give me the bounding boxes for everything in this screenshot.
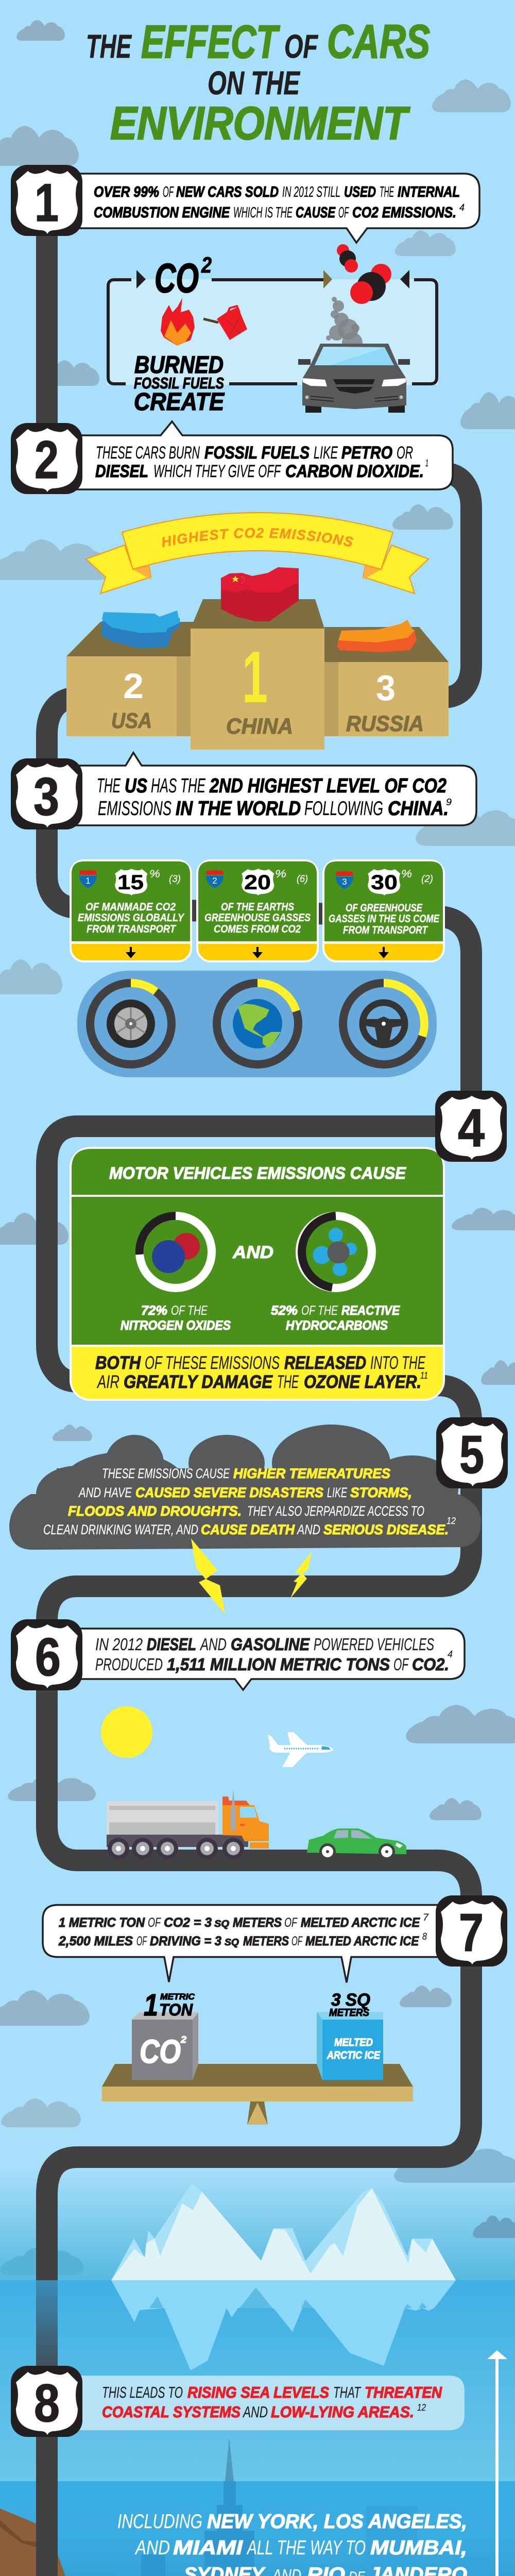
storm cloud text [43, 1466, 456, 1537]
panel: motor vehicles emissions [71, 1148, 444, 1400]
storm cloud [9, 1425, 481, 1550]
highway sign: 15 percent: 1 [85, 876, 91, 886]
bubble 7: OF [284, 1916, 298, 1930]
bubble 8: THIS LEADS TO [102, 2383, 183, 2401]
highway sign: 15 percent: % [149, 868, 160, 880]
bubble 6: DIESEL [147, 1635, 196, 1654]
bubble 1: USED [344, 184, 376, 200]
bubble 6: PRODUCED [95, 1655, 163, 1674]
submerged road section [36, 2280, 58, 2391]
cities text: ALL THE WAY TO [247, 2537, 366, 2559]
podium ranks: 3 [376, 668, 396, 708]
title: ON THE [208, 64, 301, 101]
bubble 2: THESE CARS BURN [96, 443, 200, 463]
scale labels: 3 SQ [331, 1990, 370, 2010]
podium ranks: CHINA [226, 714, 293, 739]
CO2 label: CO [154, 255, 199, 301]
route shield 1: 1 [35, 173, 59, 233]
storm cloud text: AND [296, 1522, 320, 1537]
route shield 6: 6 [35, 1628, 61, 1687]
storm cloud text: 12 [447, 1516, 456, 1526]
highway sign: 15 percent: FROM TRANSPORT [87, 923, 177, 935]
bubble 2: LIKE [314, 443, 338, 463]
bubble 1: COMBUSTION ENGINE [94, 205, 230, 221]
bubble 7 [43, 1905, 443, 1982]
highway sign: 30 percent: (2) [421, 874, 433, 885]
ozone statement: AIR [97, 1372, 119, 1392]
skyline silhouette [113, 2437, 515, 2576]
bubble 6: OF [393, 1655, 409, 1674]
and label: AND [232, 1243, 273, 1262]
icon: sun [101, 1706, 152, 1758]
bubble 1: OF [338, 205, 349, 221]
ozone statement: INTO THE [370, 1353, 425, 1373]
icon: flame [161, 298, 195, 346]
ozone statement: 11 [420, 1370, 428, 1381]
bubble 7: OF [148, 1916, 161, 1930]
ring: steering wheel 30 percent [343, 983, 424, 1064]
bubble 3: EMISSIONS [98, 798, 171, 820]
cities text: MIAMI [173, 2537, 243, 2559]
scale labels: 2 [180, 2035, 186, 2045]
ribbon: highest CO2 emissions: HIGHEST CO2 EMISSIONS [162, 528, 353, 547]
cities text: AND [134, 2537, 170, 2559]
storm cloud text: CAUSED SEVERE DISASTERS [135, 1485, 323, 1500]
water layers [0, 2280, 515, 2576]
bubble 1: OVER 99% [94, 184, 159, 200]
title: CARS [327, 15, 430, 68]
route shield 5: 5 [459, 1425, 484, 1485]
CO2 label: 2 [201, 253, 212, 278]
sky gradient near water [0, 2166, 515, 2280]
bubble 6: 4 [448, 1649, 453, 1659]
bubble 3 [72, 753, 476, 825]
ring: globe 20 percent [217, 983, 298, 1064]
ozone statement: THE [277, 1372, 299, 1392]
caption: hydrocarbons: OF THE [301, 1303, 338, 1318]
caption: hydrocarbons: REACTIVE [341, 1303, 400, 1318]
route shield 6 [11, 1619, 82, 1690]
bubble 1: OF [163, 184, 174, 200]
arrow markers [136, 270, 409, 289]
route shield 2 [11, 423, 82, 494]
route shield 4: 4 [458, 1098, 485, 1158]
bubble 8: RISING SEA LEVELS [187, 2383, 329, 2401]
title: THE [86, 28, 132, 65]
cities text: INCLUDING [117, 2511, 202, 2533]
bubble 7: CO2 = 3 [164, 1916, 212, 1930]
highway sign: 30 percent: GASSES IN THE US COME [329, 913, 440, 925]
title: OF [284, 28, 318, 65]
caption: hydrocarbons [271, 1303, 400, 1333]
bubble 2: FOSSIL FUELS [204, 443, 310, 463]
title: EFFECT [141, 16, 280, 68]
burned fossil fuels create text [134, 351, 225, 416]
ozone statement: BOTH [95, 1353, 141, 1373]
highway sign: 20 percent: 2 [212, 876, 217, 886]
scale labels: METERS [329, 2007, 370, 2019]
bubble 2 [72, 421, 453, 489]
map: China [221, 567, 299, 621]
cities text: MUMBAI, [370, 2537, 467, 2559]
balance scale [102, 1988, 413, 2125]
bubble 1: WHICH IS THE [233, 205, 293, 221]
storm cloud text: THESE EMISSIONS CAUSE [102, 1466, 230, 1481]
podium ranks: 2 [123, 666, 144, 706]
ozone statement: RELEASED [284, 1353, 366, 1373]
bubble 1: THE [380, 184, 394, 200]
scale labels: METRIC [160, 1992, 195, 2002]
podium [66, 567, 449, 750]
icon: CO2 molecules [337, 244, 391, 304]
panel heading: MOTOR VEHICLES EMISSIONS CAUSE [109, 1164, 407, 1182]
highway sign: 15 percent: (3) [169, 874, 181, 885]
bubble 7: MELTED ARCTIC ICE [301, 1916, 420, 1930]
bubble 7: OF [291, 1934, 303, 1948]
bubble 1 [72, 174, 479, 243]
bubble 6: POWERED VEHICLES [314, 1635, 434, 1654]
bubble 1: CAUSE [296, 205, 336, 221]
ozone statement: GREATLY DAMAGE [124, 1372, 273, 1392]
podium ranks: USA [111, 708, 152, 733]
podium ranks [111, 636, 424, 739]
storm cloud text: CAUSE DEATH [201, 1522, 295, 1537]
bubble 1: IN 2012 STILL [282, 184, 340, 200]
bubble 6 [72, 1629, 465, 1690]
highway sign: 15 percent: EMISSIONS GLOBALLY [78, 912, 185, 924]
podium ranks: 1 [242, 636, 268, 718]
route shield 4 [435, 1091, 507, 1162]
bubble 1: INTERNAL [398, 184, 460, 200]
bubble 7: 7 [423, 1912, 429, 1923]
ozone statement: OZONE LAYER. [304, 1372, 421, 1392]
route shield 8 [11, 2366, 82, 2437]
highway sign: 15 percent: 15 [117, 871, 144, 894]
highway sign: 30 percent [323, 860, 444, 961]
scale labels: MELTED [334, 2037, 373, 2048]
arrow: rising sea level [487, 2350, 507, 2576]
burned fossil fuels create text: BURNED [134, 351, 224, 378]
bubble 8: LOW-LYING AREAS. [271, 2403, 414, 2421]
scale labels: CO [140, 2033, 181, 2070]
bubble 3: 9 [446, 797, 452, 807]
ozone statement: OF THESE EMISSIONS [145, 1353, 280, 1373]
title [86, 15, 430, 149]
panel: burned fossil fuels [107, 244, 438, 416]
bubble 7: 2,500 MILES [58, 1934, 133, 1948]
panel frame [108, 280, 437, 384]
highway sign: 30 percent: 3 [342, 877, 347, 887]
bubble 2: OR [397, 443, 413, 463]
highway sign: 20 percent: GREENHOUSE GASSES [204, 912, 311, 924]
highway sign: 20 percent: OF THE EARTHS [221, 901, 294, 913]
burned fossil fuels create text: FOSSIL FUELS [134, 374, 224, 392]
panel: percentage rings [77, 971, 437, 1077]
donut: nitrogen oxides [140, 1216, 212, 1288]
caption: hydrocarbons: HYDROCARBONS [286, 1318, 388, 1333]
bubble 7: SQ [214, 1919, 229, 1929]
bubble 1: NEW CARS SOLD [176, 184, 279, 200]
icon: lightning bolts [191, 1538, 312, 1614]
cities text [117, 2511, 467, 2576]
icon: green car [307, 1828, 406, 1860]
route shield 3 [11, 758, 82, 829]
scale labels: 1 [144, 1988, 158, 2022]
cities text: NEW YORK, LOS ANGELES, [207, 2511, 467, 2533]
bubble 7: 8 [422, 1931, 427, 1942]
icon: exhaust smoke [326, 297, 363, 353]
highway sign: 20 percent: % [275, 868, 286, 880]
storm cloud text: CLEAN DRINKING WATER, AND [43, 1522, 198, 1537]
donut: hydrocarbons [300, 1216, 372, 1288]
icon: truck [107, 1789, 269, 1859]
highway sign: 30 percent: % [401, 868, 412, 880]
ring: tire 15 percent [90, 983, 171, 1064]
bubble 8 [72, 2376, 465, 2430]
bubble 3: FOLLOWING [304, 798, 383, 820]
bubble 7: MELTED ARCTIC ICE [305, 1934, 419, 1948]
storm cloud text: STORMS, [350, 1485, 412, 1500]
ground [0, 2509, 515, 2576]
bubble 1: CO2 EMISSIONS. [352, 205, 456, 221]
scale labels [140, 1988, 381, 2070]
bubble 2: DIESEL [95, 462, 148, 481]
bubble 6: 1,511 MILLION METRIC TONS [167, 1655, 390, 1674]
route shield 5 [436, 1417, 508, 1488]
bubble 8: THAT [333, 2383, 361, 2401]
bubble 3: HAS THE [151, 775, 206, 797]
map: USA [102, 611, 180, 648]
bubble 3: IN THE WORLD [176, 798, 301, 820]
icon: car front [298, 344, 410, 413]
title: ENVIRONMENT [110, 98, 410, 149]
bubble 3: 2ND HIGHEST LEVEL OF CO2 [209, 775, 447, 797]
bubble 1: 4 [459, 202, 465, 213]
route shield 7 [436, 1895, 507, 1967]
bubble 2: WHICH THEY GIVE OFF [153, 462, 281, 481]
caption: nitrogen oxides [121, 1303, 231, 1333]
highway sign: 20 percent: (6) [297, 874, 308, 885]
bubble 7: OF [136, 1934, 147, 1948]
bubble 8: AND [243, 2403, 268, 2421]
CO2 block [132, 2012, 198, 2080]
bubble 7: METERS [243, 1934, 289, 1948]
scale labels: ARCTIC ICE [327, 2049, 381, 2061]
scale labels: TON [159, 2001, 193, 2019]
bubble 2: CARBON DIOXIDE. [285, 462, 424, 481]
storm cloud text: HIGHER TEMERATURES [233, 1466, 390, 1481]
route shield 7: 7 [459, 1903, 484, 1963]
caption: hydrocarbons: 52% [271, 1303, 298, 1318]
icon: fuel can [203, 306, 247, 340]
highway sign: 30 percent: FROM TRANSPORT [343, 924, 428, 936]
ozone statement [95, 1353, 428, 1392]
storm cloud text: THEY ALSO JERPARDIZE ACCESS TO [247, 1503, 424, 1519]
bubble 6: IN 2012 [95, 1635, 143, 1654]
bubble 8: 12 [417, 2402, 426, 2413]
route shield 2: 2 [35, 430, 59, 490]
bubble 6: GASOLINE [231, 1635, 310, 1654]
bubble 7: DRIVING = 3 [150, 1934, 221, 1948]
highway sign: 30 percent: OF GREENHOUSE [346, 902, 423, 914]
ribbon: highest CO2 emissions [85, 512, 430, 595]
route shield 3: 3 [33, 767, 59, 827]
road [47, 175, 471, 2576]
bubble 3: CHINA. [388, 798, 449, 820]
bubble 2: PETRO [341, 443, 392, 463]
caption: nitrogen oxides: OF THE [171, 1303, 208, 1318]
icon: plane [268, 1732, 333, 1767]
bubble 8: THREATEN [365, 2383, 442, 2401]
bubble 6: AND [200, 1635, 227, 1654]
bubble 2: 1 [425, 458, 428, 468]
storm cloud text: FLOODS AND DROUGHTS. [68, 1503, 242, 1519]
storm cloud text: AND HAVE [78, 1485, 132, 1500]
highway sign: 20 percent [197, 860, 318, 961]
bubble 3: THE [97, 775, 121, 797]
bubble 8: COASTAL SYSTEMS [102, 2403, 241, 2421]
bubble 3: US [125, 775, 147, 797]
ice block [317, 2012, 383, 2080]
bubble 6: CO2. [412, 1655, 449, 1674]
highway sign: 20 percent: 20 [244, 871, 271, 894]
caption: nitrogen oxides: 72% [141, 1303, 167, 1318]
route shield 8: 8 [34, 2374, 60, 2433]
storm cloud text: LIKE [327, 1485, 348, 1500]
highway sign: 20 percent: COMES FROM CO2 [214, 923, 301, 935]
podium ranks: RUSSIA [346, 711, 424, 736]
bubble 7: METERS [233, 1916, 282, 1930]
highway sign: 30 percent: 30 [371, 871, 398, 894]
burned fossil fuels create text: CREATE [134, 388, 225, 416]
map: Russia [337, 620, 417, 652]
route shield 1 [11, 165, 82, 236]
iceberg [111, 2183, 456, 2370]
bubble 7: 1 METRIC TON [59, 1916, 145, 1930]
highway sign: 15 percent: OF MANMADE CO2 [85, 901, 176, 913]
highway sign: 15 percent [71, 860, 191, 961]
storm cloud text: SERIOUS DISEASE. [323, 1522, 449, 1537]
bubble 7: SQ [225, 1937, 239, 1947]
caption: nitrogen oxides: NITROGEN OXIDES [121, 1318, 231, 1333]
